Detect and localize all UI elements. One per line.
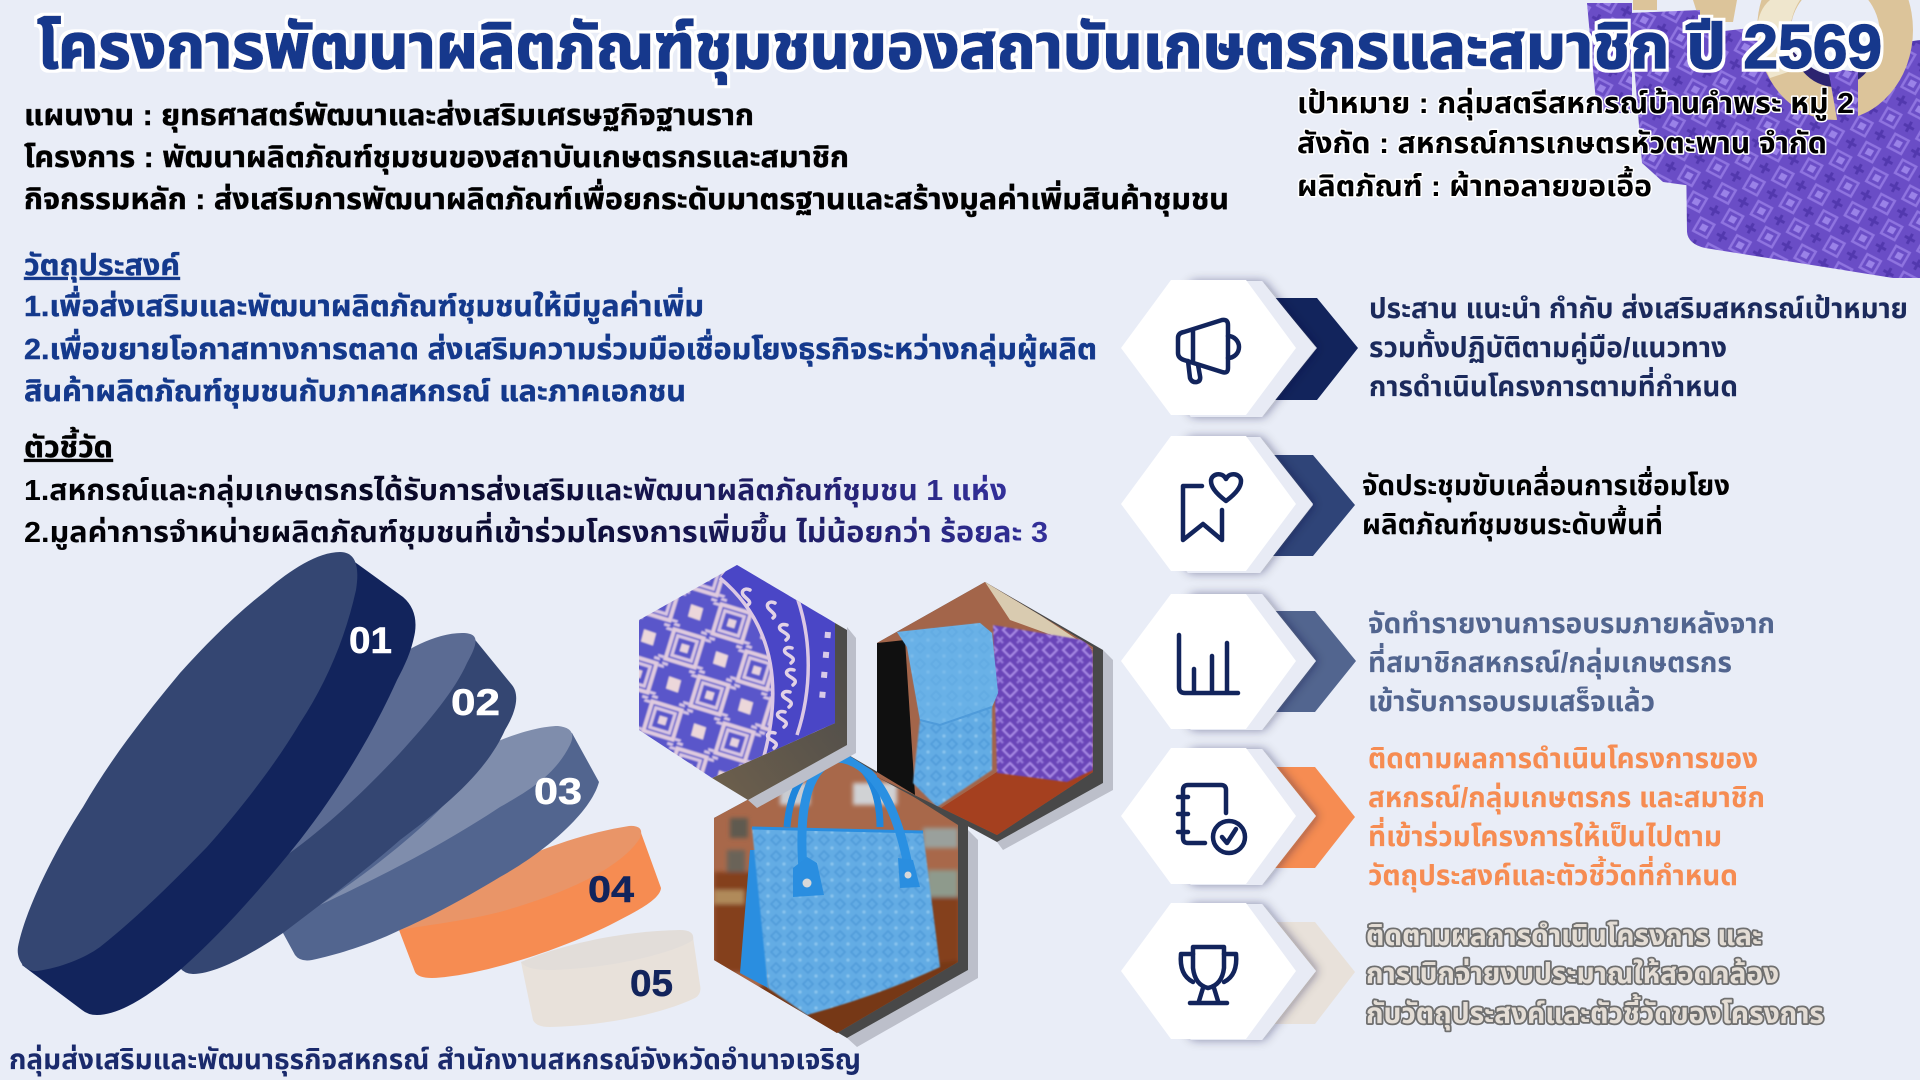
step 2 text: [1362, 465, 1730, 541]
project info text block: [24, 100, 1229, 217]
project info text block: กิจกรรมหลัก : ส่งเสริมการพัฒนาผลิตภัณฑ์เพื่อยกระดับมาตรฐานและสร้างมูลค่าเพิ่มสินค้าชุมชน: [24, 178, 1229, 217]
objectives text block: 1.เพื่อส่งเสริมและพัฒนาผลิตภัณฑ์ชุมชนให้มีมูลค่าเพิ่ม: [24, 285, 704, 324]
indicators text block: 2.มูลค่าการจำหน่ายผลิตภัณฑ์ชุมชนที่เข้าร่วมโครงการเพิ่มขึ้น ไม่น้อยกว่า ร้อยละ 3: [24, 511, 1048, 550]
icon: bookmark with heart: [1183, 474, 1241, 540]
disc 04: 04: [588, 869, 634, 910]
disc 03: 03: [534, 771, 582, 812]
disc 01: [18, 552, 415, 1015]
photo: purple woven bags with wooden handles: [1587, 0, 1920, 278]
step 5 text: [1366, 920, 1824, 1030]
objectives text block: [24, 250, 1097, 408]
step 3 text: จัดทำรายงานการอบรมภายหลังจาก: [1368, 608, 1775, 639]
icon: notebook with check: [1178, 785, 1245, 853]
footer credit: กลุ่มส่งเสริมและพัฒนาธุรกิจสหกรณ์ สำนักงานสหกรณ์จังหวัดอำนาจเจริญ: [9, 1044, 861, 1076]
step 2 text: จัดประชุมขับเคลื่อนการเชื่อมโยง: [1362, 465, 1730, 502]
indicators text block: ตัวชี้วัด: [24, 426, 113, 464]
icon: megaphone: [1178, 320, 1239, 382]
photo hexagon: blue and purple bags: [870, 575, 1113, 850]
step 3 text: [1368, 608, 1775, 717]
step 1: megaphone hexagon and text: [1121, 280, 1908, 417]
chart: stacked discs 01 to 05: [18, 552, 700, 1027]
step 5 text: การเบิกจ่ายงบประมาณให้สอดคล้อง: [1366, 958, 1779, 989]
step 1 text: รวมทั้งปฏิบัติตามคู่มือ/แนวทาง: [1369, 328, 1727, 365]
step 5: trophy hexagon and text: [1121, 903, 1824, 1040]
step 5 text: กับวัตถุประสงค์และตัวชี้วัดของโครงการ: [1366, 993, 1824, 1030]
arrow chevron 3: [1273, 611, 1356, 712]
icon: trophy: [1181, 947, 1236, 1003]
disc 04: [399, 826, 661, 978]
step 3 text: ที่สมาชิกสหกรณ์/กลุ่มเกษตรกร: [1368, 642, 1732, 679]
project info text block: แผนงาน : ยุทธศาสตร์พัฒนาและส่งเสริมเศรษฐกิจฐานราก: [24, 100, 754, 132]
target group text block: [1297, 88, 1854, 203]
step 1 text: ประสาน แนะนำ กำกับ ส่งเสริมสหกรณ์เป้าหมาย: [1369, 293, 1908, 324]
step 4 text: ติดตามผลการดำเนินโครงการของ: [1368, 743, 1758, 774]
disc 02: [180, 633, 516, 974]
arrow chevron 2: [1273, 455, 1355, 556]
project info text block: โครงการ : พัฒนาผลิตภัณฑ์ชุมชนของสถาบันเกษตรกรและสมาชิก: [24, 142, 849, 174]
icon: bar chart: [1179, 635, 1238, 693]
disc 05: [521, 930, 700, 1027]
step 4 text: สหกรณ์/กลุ่มเกษตรกร และสมาชิก: [1368, 782, 1765, 814]
arrow chevron 4: [1273, 767, 1355, 868]
photo hexagon: blue handbag: [710, 745, 978, 1047]
title: โครงการพัฒนาผลิตภัณฑ์ชุมชนของสถาบันเกษตรกรและสมาชิก ปี 2569: [37, 13, 1882, 84]
photo hexagon: woven fabric: [630, 560, 860, 808]
step 4: checklist hexagon and text: [1121, 743, 1765, 892]
disc 03: [283, 726, 599, 960]
indicators text block: [24, 426, 1048, 550]
indicators text block: 1.สหกรณ์และกลุ่มเกษตรกรได้รับการส่งเสริมและพัฒนาผลิตภัณฑ์ชุมชน 1 แห่ง: [24, 475, 1007, 507]
step 2 text: ผลิตภัณฑ์ชุมชนระดับพื้นที่: [1362, 504, 1663, 541]
arrow chevron 5: [1273, 922, 1355, 1024]
disc 01: 01: [349, 620, 392, 661]
step 3 text: เข้ารับการอบรมเสร็จแล้ว: [1368, 686, 1655, 717]
target group text block: เป้าหมาย : กลุ่มสตรีสหกรณ์บ้านคำพระ หมู่ 2: [1297, 88, 1854, 121]
step 1 text: [1369, 293, 1908, 402]
step 4 text: [1368, 743, 1765, 892]
step 4 text: ที่เข้าร่วมโครงการให้เป็นไปตาม: [1368, 816, 1722, 852]
step 3: chart hexagon and text: [1121, 594, 1775, 730]
target group text block: สังกัด : สหกรณ์การเกษตรหัวตะพาน จำกัด: [1297, 128, 1827, 160]
disc 02: 02: [451, 682, 500, 723]
disc 05: 05: [630, 963, 673, 1004]
target group text block: ผลิตภัณฑ์ : ผ้าทอลายขอเอื้อ: [1297, 165, 1652, 203]
step 4 text: วัตถุประสงค์และตัวชี้วัดที่กำหนด: [1368, 855, 1738, 892]
objectives text block: 2.เพื่อขยายโอกาสทางการตลาด ส่งเสริมความร่วมมือเชื่อมโยงธุรกิจระหว่างกลุ่มผู้ผลิต: [24, 328, 1097, 367]
arrow chevron 1: [1275, 298, 1358, 400]
step 1 text: การดำเนินโครงการตามที่กำหนด: [1369, 366, 1738, 402]
objectives text block: สินค้าผลิตภัณฑ์ชุมชนกับภาคสหกรณ์ และภาคเอกชน: [24, 376, 686, 408]
objectives text block: วัตถุประสงค์: [24, 250, 180, 282]
step 5 text: ติดตามผลการดำเนินโครงการ และ: [1366, 920, 1762, 951]
step 2: bookmark hexagon and text: [1121, 436, 1730, 573]
